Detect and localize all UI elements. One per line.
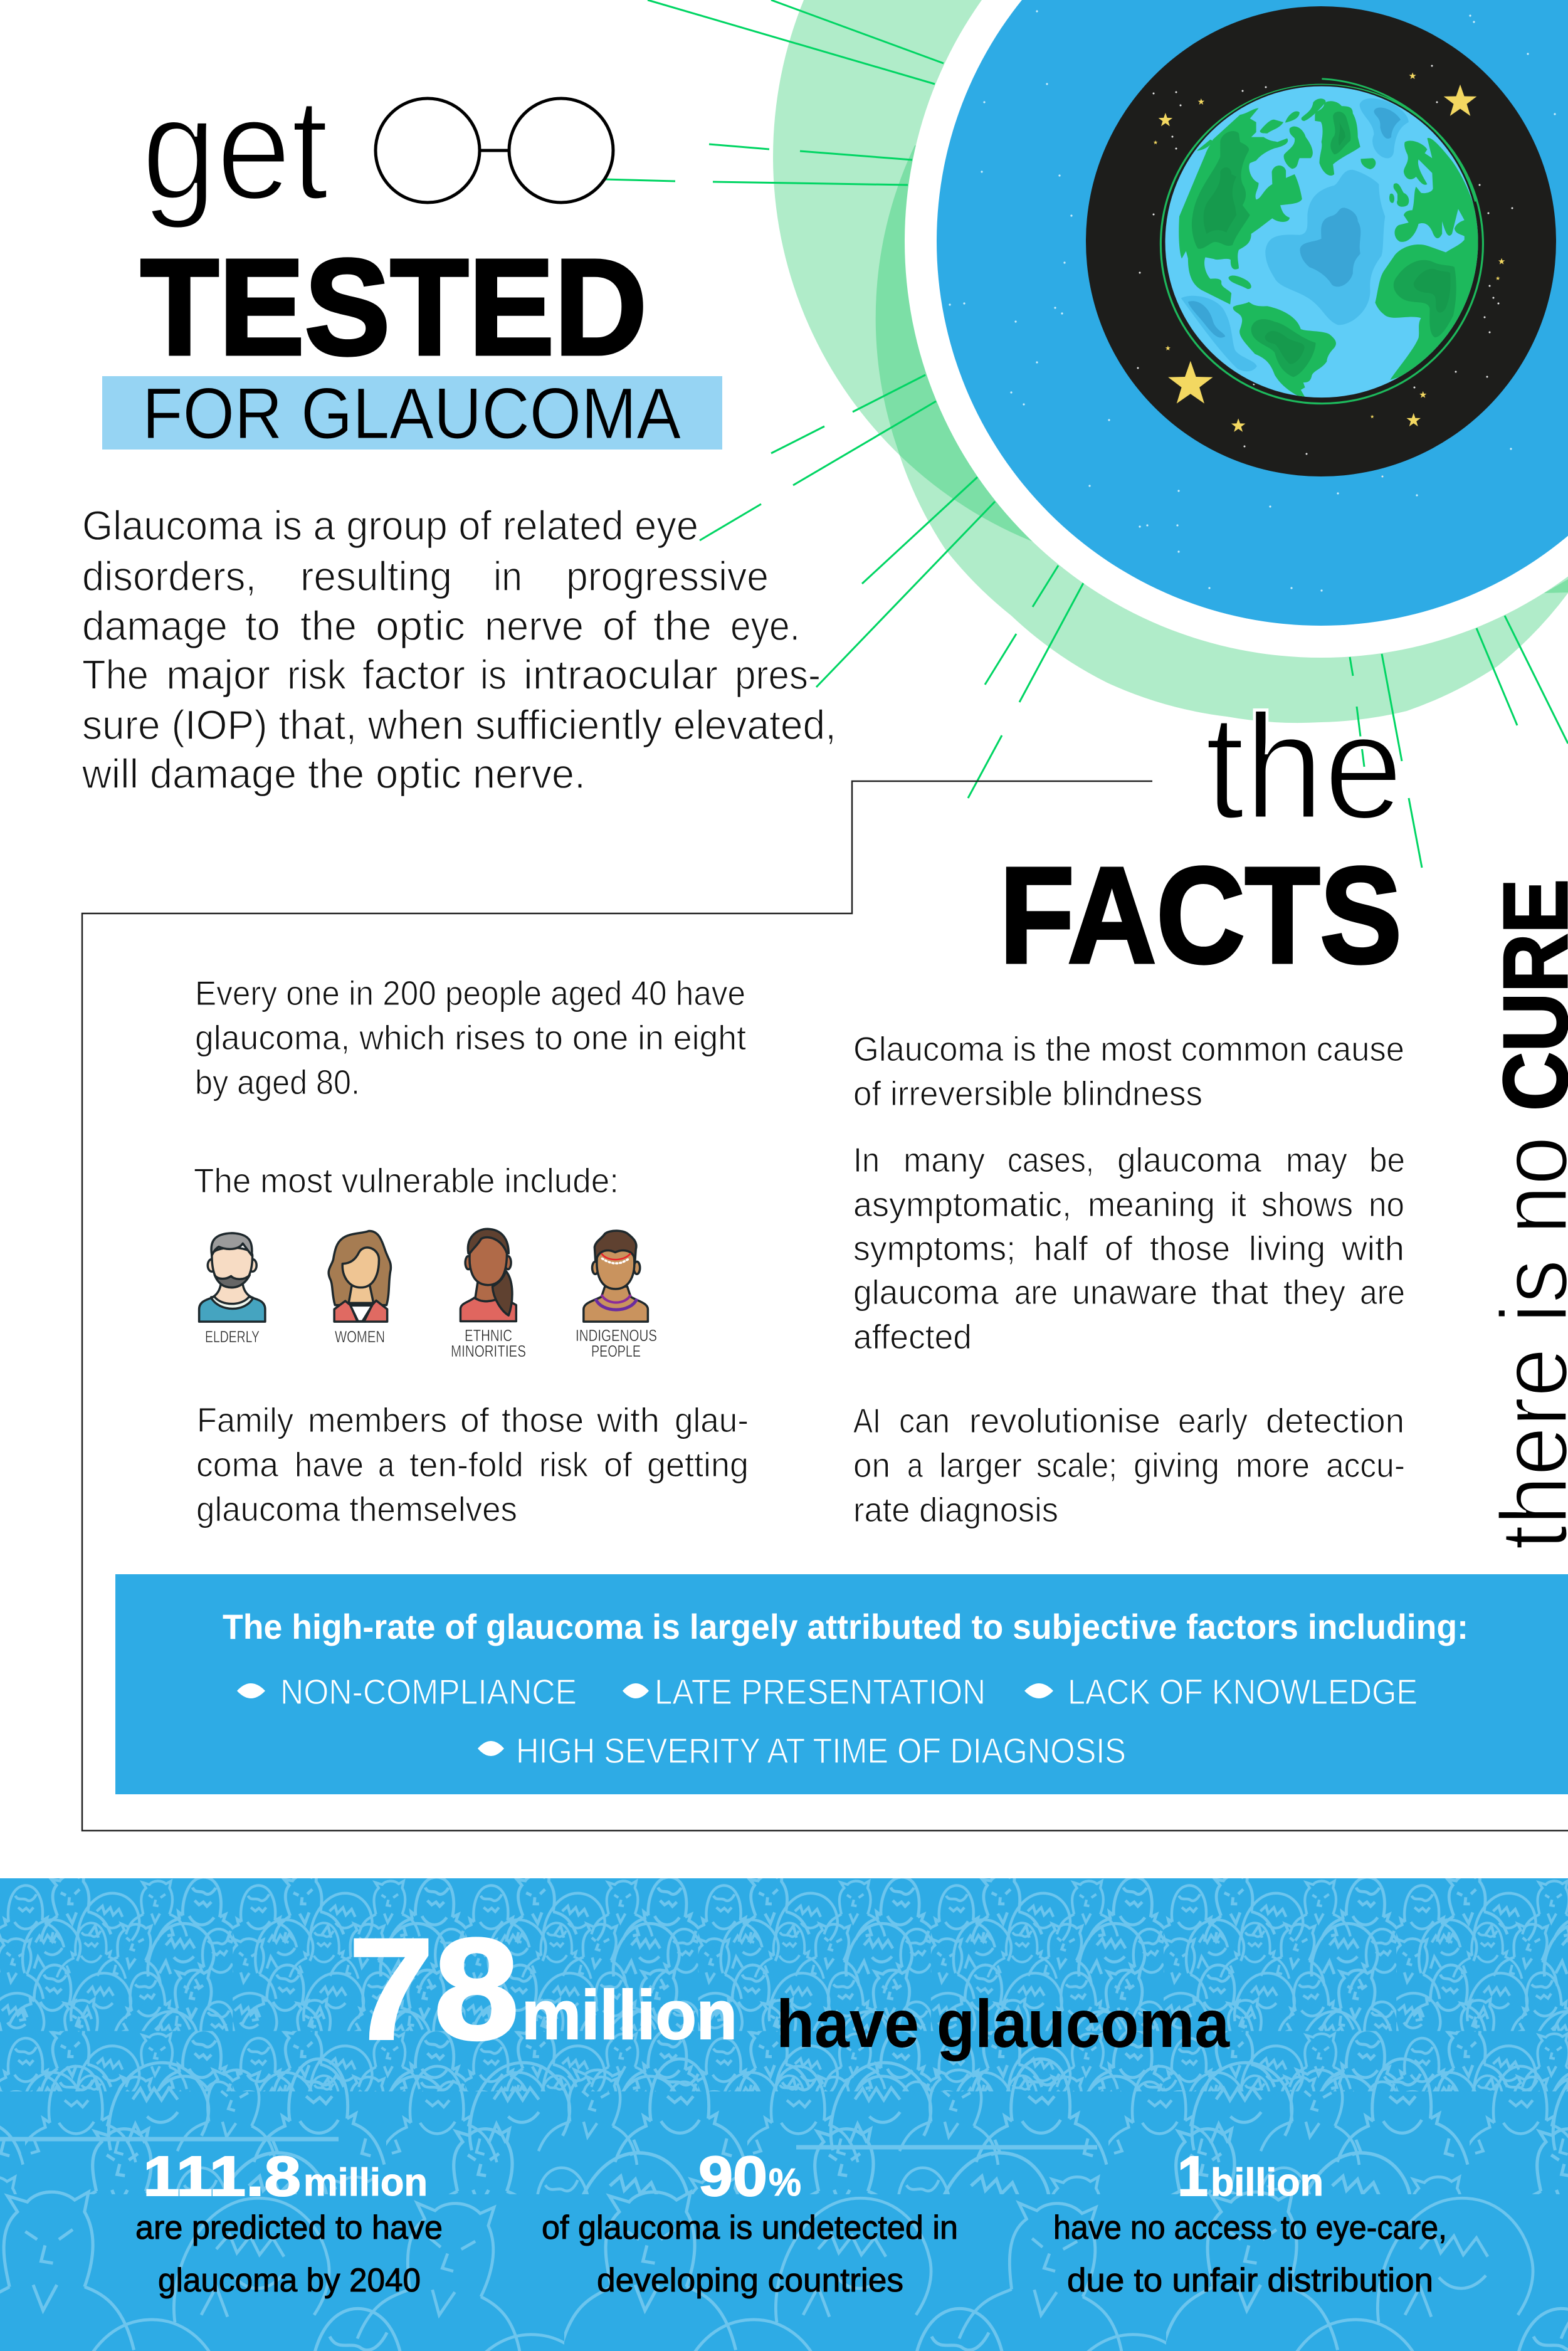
text: ai detection: scale; xyxy=(1036,1446,1117,1485)
intro paragraph: sure (IOP) that, when sufficiently elevated, xyxy=(82,702,836,748)
text: ai detection: detection xyxy=(1266,1401,1404,1440)
text: ai detection: AI xyxy=(853,1401,881,1440)
text: most vulnerable: The most vulnerable include: xyxy=(194,1161,619,1200)
text: asymptomatic: glaucoma xyxy=(1117,1140,1261,1179)
text: ai detection: on xyxy=(853,1446,890,1485)
stat: 90 percent: developing countries xyxy=(597,2262,903,2299)
title banner: for glaucoma: FOR GLAUCOMA xyxy=(142,374,681,454)
text: family members: risk xyxy=(539,1445,588,1484)
text: family members: of xyxy=(460,1401,490,1439)
icon: elderly xyxy=(199,1233,265,1322)
text: asymptomatic: meaning xyxy=(1088,1185,1215,1224)
intro paragraph xyxy=(82,502,836,797)
intro paragraph: optic xyxy=(376,602,465,649)
text: asymptomatic: it xyxy=(1230,1185,1246,1224)
vertical heading: there is no cure xyxy=(1481,879,1568,1550)
text: family members xyxy=(196,1401,749,1528)
stat: 78 million have glaucoma: million xyxy=(522,1977,737,2054)
text: ai detection xyxy=(853,1401,1405,1529)
intro paragraph: progressive xyxy=(566,553,769,599)
icon: women xyxy=(329,1231,391,1322)
list: factors: NON-COMPLIANCE xyxy=(280,1672,577,1712)
icon labels: ELDERLY xyxy=(205,1327,260,1346)
stat: 90 percent: of glaucoma is undetected in xyxy=(542,2209,958,2246)
text: family members: glau- xyxy=(675,1401,749,1439)
text: ai detection: early xyxy=(1178,1401,1248,1440)
text: family members: getting xyxy=(647,1445,749,1484)
text: one in 200 xyxy=(195,974,746,1102)
text: asymptomatic: are xyxy=(1360,1273,1405,1312)
intro paragraph: the xyxy=(300,602,357,649)
panel outline: the facts xyxy=(82,781,1568,1831)
text: ai detection: accu- xyxy=(1326,1446,1405,1485)
text: ai detection: more xyxy=(1236,1446,1310,1485)
intro paragraph: will damage the optic nerve. xyxy=(82,750,586,797)
green halo xyxy=(773,0,1568,723)
stat: 111.8 million: are predicted to have xyxy=(135,2209,443,2246)
text: asymptomatic: shows xyxy=(1261,1185,1353,1224)
stat: 1 billion xyxy=(1053,2145,1447,2299)
stat: 1 billion: billion xyxy=(1211,2161,1323,2204)
text: family members: coma xyxy=(196,1445,278,1484)
stat: 1 billion: due to unfair distribution xyxy=(1067,2262,1433,2299)
stat: 78 million have glaucoma xyxy=(349,1908,1230,2070)
text: asymptomatic: be xyxy=(1369,1140,1405,1179)
text: asymptomatic: they xyxy=(1283,1273,1345,1312)
stat: 90 percent xyxy=(542,2145,958,2299)
icon labels: PEOPLE xyxy=(591,1342,641,1360)
heading: FACTS: FACTS xyxy=(999,839,1402,992)
stat: 111.8 million: 111.8 xyxy=(143,2145,301,2208)
text: most common cause xyxy=(853,1029,1404,1113)
intro paragraph: disorders, xyxy=(82,553,256,599)
stat: 90 percent: % xyxy=(769,2161,801,2204)
text: ai detection: revolutionise xyxy=(969,1401,1160,1440)
intro paragraph: major xyxy=(166,651,270,698)
text: asymptomatic: In xyxy=(853,1140,880,1179)
text: asymptomatic: cases, xyxy=(1008,1140,1094,1179)
text: asymptomatic: that xyxy=(1211,1273,1268,1312)
icon labels: MINORITIES xyxy=(451,1342,526,1360)
title: TESTED: TESTED xyxy=(140,231,647,384)
text: most common cause: Glaucoma is the most common cause xyxy=(853,1029,1404,1068)
text: ai detection: larger xyxy=(939,1446,1022,1485)
text: asymptomatic: glaucoma xyxy=(853,1273,999,1312)
text: asymptomatic: unaware xyxy=(1072,1273,1197,1312)
eye: black pupil with stars xyxy=(1086,6,1556,478)
text: family members: those xyxy=(502,1401,584,1439)
text: family members: members xyxy=(308,1401,447,1439)
eye: blue iris xyxy=(937,0,1568,626)
text: asymptomatic: asymptomatic, xyxy=(853,1185,1071,1224)
icon labels: ETHNIC xyxy=(465,1326,512,1345)
text: asymptomatic xyxy=(853,1140,1405,1356)
text: asymptomatic: no xyxy=(1369,1185,1404,1224)
title: get: get xyxy=(142,68,329,230)
heading: the: the xyxy=(1205,684,1403,850)
text: family members: of xyxy=(604,1445,633,1484)
intro paragraph: in xyxy=(493,553,522,599)
text: ai detection: giving xyxy=(1134,1446,1219,1485)
text: ai detection: rate diagnosis xyxy=(853,1490,1058,1529)
text: one in 200: Every one in 200 people aged 40 have xyxy=(195,974,745,1012)
text: family members: have xyxy=(295,1445,364,1484)
intro paragraph: is xyxy=(480,651,507,698)
text: family members: Family xyxy=(197,1401,293,1439)
panel: statistics xyxy=(0,1878,1568,2351)
text: asymptomatic: with xyxy=(1341,1229,1404,1268)
icon labels: INDIGENOUS xyxy=(576,1326,657,1345)
text: family members: with xyxy=(596,1401,660,1439)
icon: glasses xyxy=(376,98,613,202)
heading: subjective factors: The high-rate of glaucoma is largely attributed to subjective factors including: xyxy=(223,1607,1468,1646)
list: factors: LATE PRESENTATION xyxy=(655,1672,986,1712)
intro paragraph: risk xyxy=(287,651,347,698)
list: factors: HIGH SEVERITY AT TIME OF DIAGNOSIS xyxy=(516,1731,1126,1771)
stat: 111.8 million xyxy=(135,2145,443,2299)
text: asymptomatic: of xyxy=(1105,1229,1133,1268)
stat: 78 million have glaucoma: have glaucoma xyxy=(776,1985,1230,2061)
intro paragraph: of xyxy=(602,602,637,649)
stat: 90 percent: 90 xyxy=(698,2145,767,2208)
green rays xyxy=(604,0,1568,868)
stat: 1 billion: 1 xyxy=(1177,2145,1208,2208)
crowd line-art background xyxy=(0,1878,1568,2351)
icon labels: WOMEN xyxy=(335,1327,385,1346)
text: ai detection: a xyxy=(907,1446,923,1485)
intro paragraph: Glaucoma is a group of related eye xyxy=(82,502,698,549)
intro paragraph: The xyxy=(82,651,149,698)
text: asymptomatic: affected xyxy=(853,1317,972,1356)
text: asymptomatic: may xyxy=(1286,1140,1347,1179)
text: family members: a xyxy=(378,1445,394,1484)
icons: vulnerable groups xyxy=(199,1229,657,1360)
stat: 78 million have glaucoma: 78 xyxy=(349,1908,519,2070)
text: asymptomatic: many xyxy=(903,1140,985,1179)
intro paragraph: factor xyxy=(362,651,465,698)
stat: 111.8 million: glaucoma by 2040 xyxy=(158,2262,421,2299)
eye: white sclera ring xyxy=(905,0,1568,658)
text: one in 200: glaucoma, which rises to one in eight xyxy=(195,1018,746,1057)
text: ai detection: can xyxy=(899,1401,950,1440)
intro paragraph: resulting xyxy=(300,553,452,599)
text: asymptomatic: symptoms; xyxy=(853,1229,1016,1268)
intro paragraph: nerve xyxy=(485,602,584,649)
panel: subjective factors xyxy=(115,1574,1568,1794)
stat: 111.8 million: million xyxy=(303,2161,428,2204)
intro paragraph: to xyxy=(245,602,280,649)
icon labels xyxy=(205,1326,657,1360)
text: asymptomatic: half xyxy=(1034,1229,1088,1268)
text: asymptomatic: living xyxy=(1249,1229,1325,1268)
intro paragraph: eye. xyxy=(730,602,800,649)
text: family members: ten-fold xyxy=(409,1445,524,1484)
icon: indigenous people xyxy=(584,1231,648,1322)
list: factors: LACK OF KNOWLEDGE xyxy=(1068,1672,1418,1712)
icon: ethnic minorities xyxy=(460,1229,516,1321)
list: factors xyxy=(237,1672,1418,1771)
stat: 1 billion: have no access to eye-care, xyxy=(1053,2209,1447,2246)
intro paragraph: damage xyxy=(82,602,228,649)
text: family members: glaucoma themselves xyxy=(196,1490,517,1528)
earth globe xyxy=(1160,79,1483,404)
text: one in 200: by aged 80. xyxy=(195,1063,360,1102)
intro paragraph: intraocular xyxy=(524,651,718,698)
text: asymptomatic: those xyxy=(1150,1229,1230,1268)
intro paragraph: pres- xyxy=(735,651,821,698)
intro paragraph: the xyxy=(653,602,712,649)
text: asymptomatic: are xyxy=(1014,1273,1058,1312)
text: most common cause: of irreversible blindness xyxy=(853,1074,1202,1113)
